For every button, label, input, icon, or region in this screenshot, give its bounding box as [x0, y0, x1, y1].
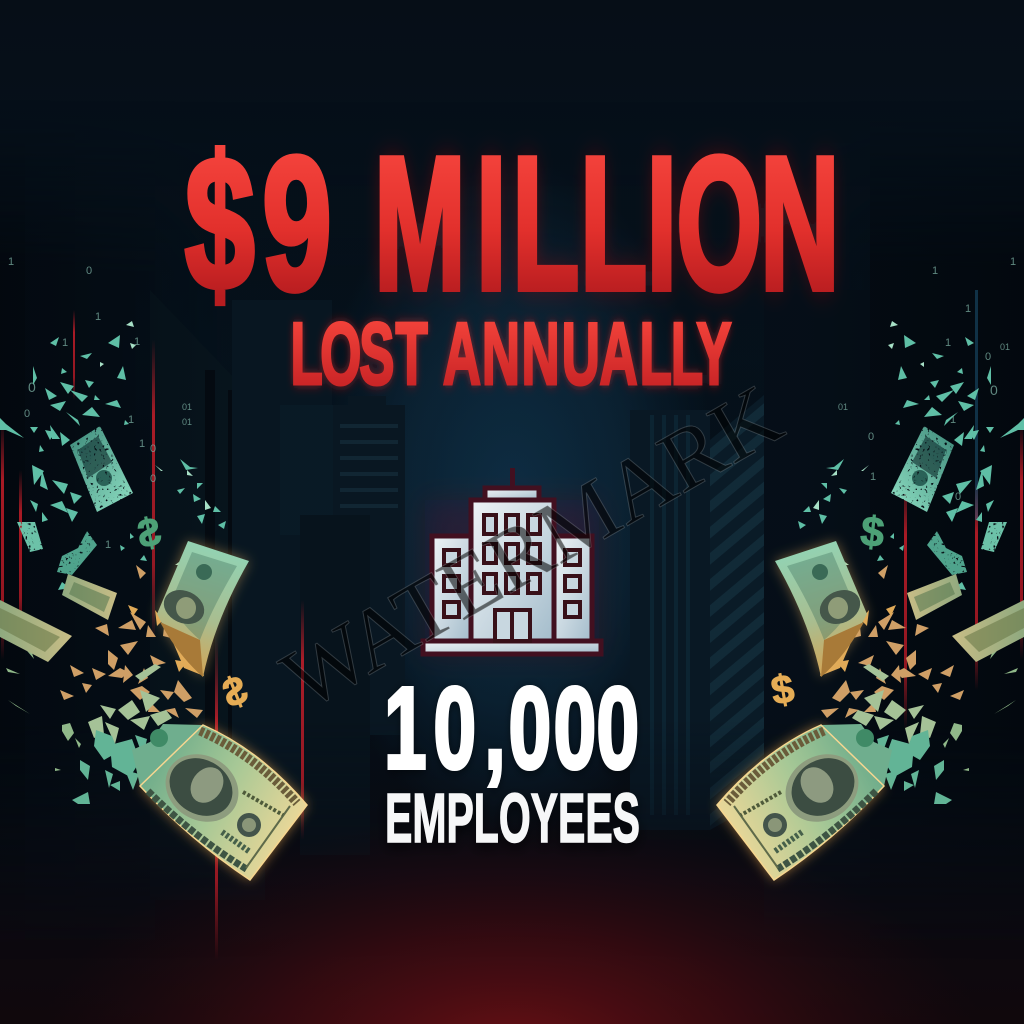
binary digits left: 1	[62, 337, 68, 349]
binary digits left: 1	[139, 438, 145, 450]
binary digits right: 01	[1000, 342, 1010, 352]
binary digits left	[8, 256, 192, 551]
exploding money left	[0, 321, 307, 880]
binary digits left: 0	[86, 265, 92, 277]
dollar sign right green: $	[858, 507, 887, 556]
binary digits left: 01	[182, 402, 192, 412]
binary digits left: 1	[134, 336, 140, 348]
value: 10,000: 10,000	[384, 665, 639, 795]
binary digits right: 0	[868, 431, 874, 443]
city skyline	[0, 202, 1024, 830]
label: Employees: EMPLOYEES	[385, 779, 640, 857]
subtitle: Lost Annually: LOST ANNUALLY	[0, 305, 732, 403]
dollar sign left green: $	[134, 509, 165, 557]
binary digits right: 0	[985, 351, 991, 363]
binary digits left: 0	[28, 379, 36, 395]
icon: office building	[423, 468, 601, 655]
subtitle: Lost Annually: LOST ANNUALLY	[0, 305, 732, 403]
binary digits right: 0	[990, 382, 998, 398]
binary digits left: 0	[150, 473, 156, 485]
binary digits left: 1	[8, 256, 14, 268]
binary digits left: 1	[95, 311, 101, 323]
exploding money right	[717, 321, 1024, 880]
value: 10,000: 10,000	[384, 663, 639, 793]
red light streaks	[1, 290, 1023, 960]
title: $9 Million: $9	[185, 118, 332, 330]
watermark: WATERMARK	[266, 367, 798, 729]
binary digits right: 0	[955, 491, 961, 503]
binary digits right: 1	[1010, 256, 1016, 268]
label: Employees: EMPLOYEES	[385, 784, 640, 862]
title: $9 Million: MILLION	[374, 117, 840, 329]
binary digits left: 1	[105, 539, 111, 551]
binary digits right	[838, 256, 1016, 503]
label: Employees	[385, 779, 640, 862]
binary digits left: 01	[182, 417, 192, 427]
binary digits left: 0	[24, 408, 30, 420]
binary digits right: 1	[945, 337, 951, 349]
binary digits left: 1	[128, 414, 134, 426]
binary digits right: 1	[870, 471, 876, 483]
binary digits right: 1	[950, 414, 956, 426]
binary digits left: 0	[150, 443, 156, 455]
binary digits right: 01	[838, 402, 848, 412]
title: $9 Million: MILLION	[374, 117, 840, 329]
dollar sign right gold: $	[768, 667, 798, 714]
binary digits right: 1	[965, 303, 971, 315]
binary digits right: 1	[932, 265, 938, 277]
dollar sign left gold: $	[217, 667, 254, 717]
